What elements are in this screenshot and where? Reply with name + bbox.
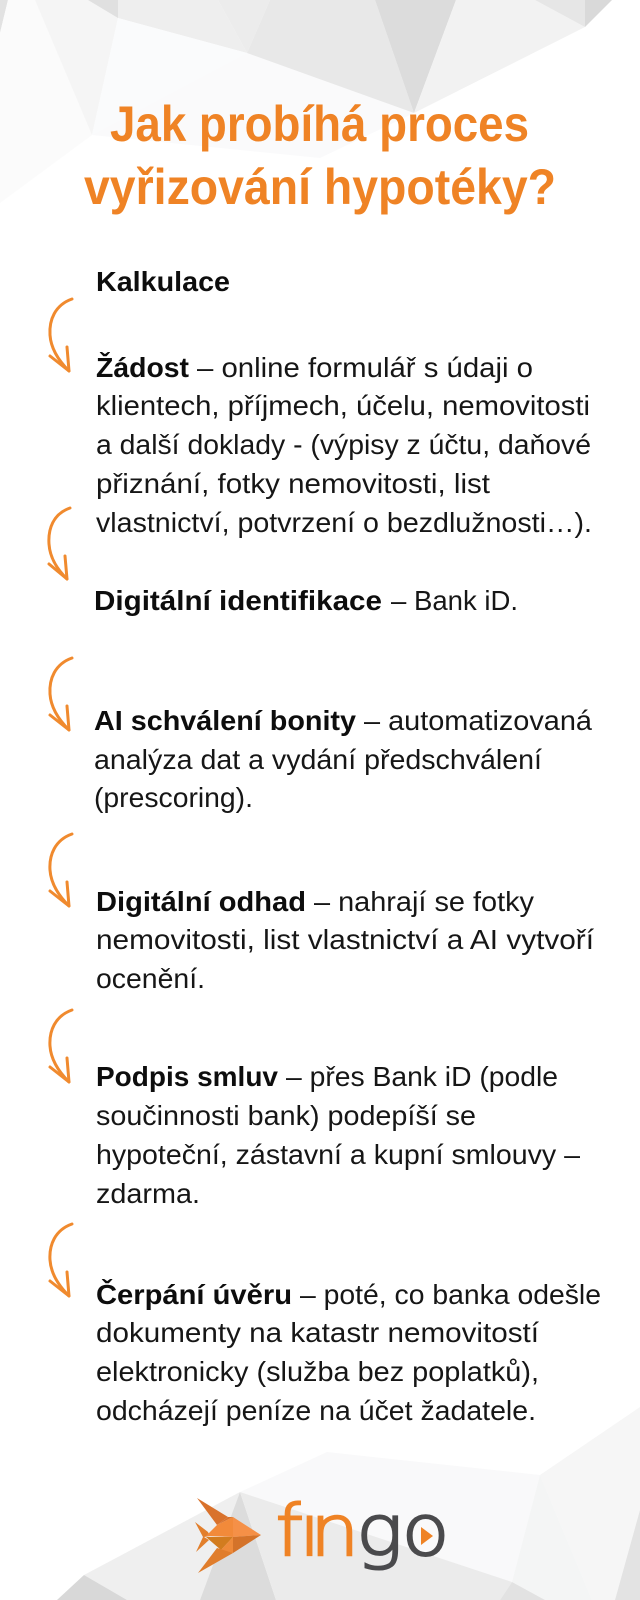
- title: vyřizování hypotéky?: [84, 159, 556, 215]
- step: Čerpání úvěru: elektronicky (služba bez poplatků),: [96, 1356, 539, 1387]
- icon: fish: [195, 1498, 261, 1573]
- arrow 1: [50, 299, 72, 371]
- step: Podpis smluv: hypoteční, zástavní a kupní smlouvy –: [96, 1139, 580, 1170]
- step: Digitální odhad: – nahrají se fotky: [314, 886, 534, 917]
- background: bottom polygons: [57, 1407, 640, 1600]
- step: Žádost: [96, 352, 592, 538]
- step: Žádost: Žádost: [96, 352, 189, 383]
- step: Digitální odhad: [96, 886, 594, 994]
- title: [84, 96, 556, 215]
- icon: play triangle: [421, 1527, 433, 1545]
- step: Čerpání úvěru: Čerpání úvěru: [96, 1278, 292, 1310]
- step: AI schválení bonity: analýza dat a vydání předschválení: [94, 744, 542, 775]
- title: Jak probíhá proces: [110, 96, 529, 152]
- step: Kalkulace: Kalkulace: [96, 266, 230, 297]
- step: Podpis smluv: zdarma.: [96, 1178, 200, 1209]
- arrow 4: [50, 834, 72, 906]
- step: Žádost: přiznání, fotky nemovitosti, list: [96, 468, 490, 499]
- arrow 5: [50, 1010, 72, 1082]
- step: Žádost: vlastnictví, potvrzení o bezdlužnosti…).: [96, 507, 592, 538]
- step: Žádost: – online formulář s údaji o: [197, 352, 533, 383]
- step: Digitální identifikace: Digitální identifikace: [94, 585, 382, 616]
- logo: fingo: [195, 1498, 444, 1573]
- step: AI schválení bonity: – automatizovaná: [364, 705, 592, 736]
- wordmark: fin: [276, 1490, 360, 1572]
- background: top polygons: [0, 0, 612, 203]
- wordmark: go: go: [356, 1490, 450, 1572]
- step: AI schválení bonity: AI schválení bonity: [94, 705, 356, 736]
- step: Žádost: klientech, příjmech, účelu, nemovitosti: [96, 390, 590, 421]
- step: Podpis smluv: součinnosti bank) podepíší se: [96, 1100, 476, 1131]
- step: Podpis smluv: Podpis smluv: [96, 1061, 278, 1092]
- arrow 6: [50, 1224, 72, 1296]
- step: Digitální odhad: ocenění.: [96, 963, 205, 994]
- step: Podpis smluv: – přes Bank iD (podle: [286, 1061, 558, 1092]
- step: Čerpání úvěru: odcházejí peníze na účet žadatele.: [96, 1395, 536, 1426]
- step: Digitální odhad: nemovitosti, list vlastnictví a AI vytvoří: [96, 924, 594, 955]
- step: Žádost: a další doklady - (výpisy z účtu, daňové: [96, 429, 591, 460]
- step: Čerpání úvěru: dokumenty na katastr nemovitostí: [96, 1317, 539, 1348]
- step: Čerpání úvěru: – poté, co banka odešle: [300, 1279, 601, 1310]
- step: Digitální identifikace: – Bank iD.: [391, 585, 518, 616]
- step: AI schválení bonity: (prescoring).: [94, 782, 253, 813]
- step: Čerpání úvěru: [96, 1278, 601, 1426]
- arrow 3: [50, 658, 72, 730]
- step: Podpis smluv: [96, 1061, 580, 1209]
- step: AI schválení bonity: [94, 705, 592, 813]
- step: Digitální identifikace: [94, 585, 518, 616]
- arrow 2: [49, 508, 70, 579]
- step: Digitální odhad: Digitální odhad: [96, 886, 306, 917]
